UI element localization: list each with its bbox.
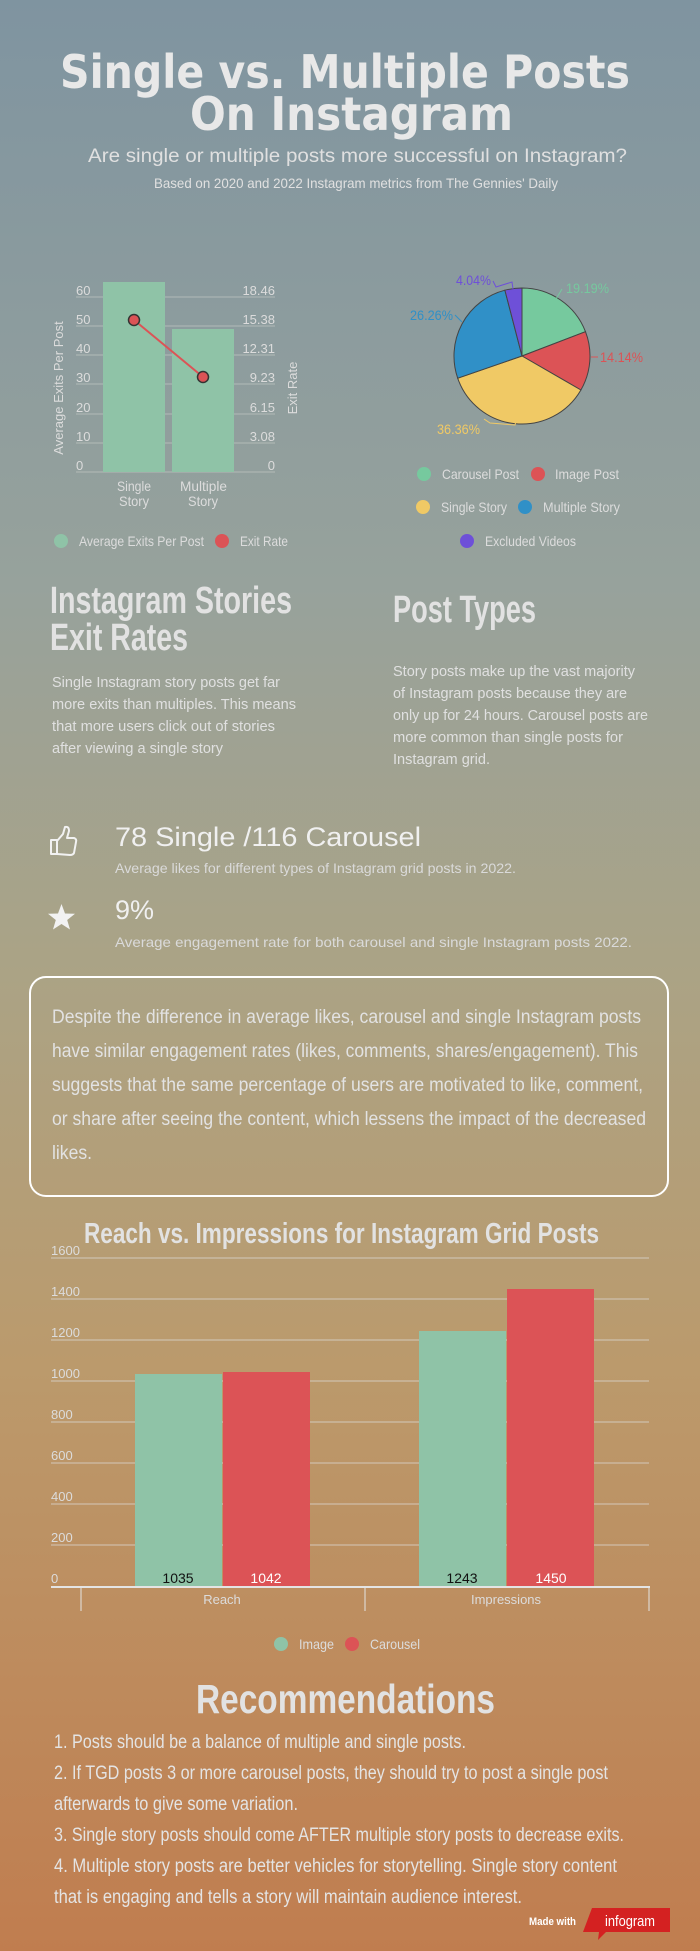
chart: story exits bar+line: Story xyxy=(188,493,218,509)
pie labels: 36.36% xyxy=(437,421,480,437)
chart: story exits bar+line: 20 xyxy=(76,400,90,415)
legend: post types: Excluded Videos xyxy=(485,533,576,549)
bar chart: reach vs impressions: 1450 xyxy=(535,1570,567,1586)
legend: post types: Single Story xyxy=(441,499,507,515)
heading: stories exit rates: Instagram Stories xyxy=(50,580,292,622)
bar chart: reach vs impressions: 1042 xyxy=(250,1570,282,1586)
bar chart: reach vs impressions: 1035 xyxy=(162,1570,194,1586)
text: post types: of Instagram posts because they are xyxy=(393,685,627,702)
text: post types: Instagram grid. xyxy=(393,751,490,768)
text: post types xyxy=(393,663,648,768)
legend: reach vs impressions: Carousel xyxy=(370,1636,420,1652)
legend: reach vs impressions xyxy=(274,1636,420,1652)
chart: story exits bar+line: Single xyxy=(117,478,151,494)
callout box: or share after seeing the content, which lessens the impact of the decreased xyxy=(52,1109,646,1130)
pie labels: 19.19% xyxy=(566,280,609,296)
heading: recommendations: Recommendations xyxy=(196,1676,495,1722)
chart: story exits bar+line: Exit Rate xyxy=(285,362,300,414)
legend: story exits: Average Exits Per Post xyxy=(79,533,204,549)
badge: made with infogram: infogram xyxy=(605,1913,655,1930)
list: recommendations: 2. If TGD posts 3 or more carousel posts, they should try to post a single post xyxy=(54,1763,609,1784)
badge: made with infogram: Made with xyxy=(529,1916,576,1928)
text: post types: only up for 24 hours. Carousel posts are xyxy=(393,707,648,724)
legend: story exits xyxy=(54,533,288,549)
stat: engagement rate xyxy=(115,895,632,950)
text: post types: more common than single posts for xyxy=(393,729,623,746)
chart: story exits bar+line: 0 xyxy=(268,458,275,473)
pie labels: 26.26% xyxy=(410,307,453,323)
stat: engagement rate: 9% xyxy=(115,895,154,925)
badge: made with infogram xyxy=(529,1908,670,1940)
callout box: Despite the difference in average likes, carousel and single Instagram posts xyxy=(52,1007,641,1028)
chart: story exits bar+line: 0 xyxy=(76,458,83,473)
bar chart: reach vs impressions: 1200 xyxy=(51,1325,80,1340)
chart: story exits bar+line: 40 xyxy=(76,341,90,356)
subtitle: Are single or multiple posts more successful on Instagram? xyxy=(88,146,627,167)
stat: average likes: 78 Single /116 Carousel xyxy=(115,822,421,852)
bar chart: reach vs impressions: 1243 xyxy=(446,1570,478,1586)
bar chart: reach vs impressions: 1400 xyxy=(51,1284,80,1299)
chart: story exits bar+line: 12.31 xyxy=(242,341,275,356)
bar chart: reach vs impressions: 1000 xyxy=(51,1366,80,1381)
legend: post types: Image Post xyxy=(555,466,619,482)
legend: post types xyxy=(416,466,620,549)
title: On Instagram xyxy=(190,87,513,141)
chart: story exits bar+line: Story xyxy=(119,493,149,509)
text: stories exit rates: that more users click out of stories xyxy=(52,718,275,735)
icon: star xyxy=(48,904,75,930)
callout box: have similar engagement rates (likes, comments, shares/engagement). This xyxy=(52,1041,638,1062)
exit rate line xyxy=(128,314,208,382)
bar chart: reach vs impressions: 0 xyxy=(51,1571,58,1586)
list: recommendations xyxy=(54,1732,624,1908)
legend: reach vs impressions: Image xyxy=(299,1636,334,1652)
list: recommendations: afterwards to give some variation. xyxy=(54,1794,298,1815)
list: recommendations: 1. Posts should be a balance of multiple and single posts. xyxy=(54,1732,466,1753)
text: stories exit rates xyxy=(52,674,296,757)
legend: post types: Carousel Post xyxy=(442,466,519,482)
title: Single vs. Multiple Posts xyxy=(60,45,630,99)
bar chart: reach vs impressions: 200 xyxy=(51,1530,73,1545)
callout box: likes. xyxy=(52,1143,92,1164)
chart: story exits bar+line: 50 xyxy=(76,312,90,327)
chart: story exits bar+line: 6.15 xyxy=(250,400,275,415)
bar: multiple story xyxy=(172,329,234,472)
pie labels xyxy=(410,272,643,437)
text: post types: Story posts make up the vast majority xyxy=(393,663,635,680)
stat: engagement rate: Average engagement rate for both carousel and single Instagram posts 2022. xyxy=(115,934,632,950)
stat: average likes xyxy=(115,822,516,876)
chart: story exits bar+line: Multiple xyxy=(180,478,227,494)
heading: stories exit rates: Exit Rates xyxy=(50,617,188,659)
heading: post types: Post Types xyxy=(393,589,536,631)
chart: story exits bar+line: 3.08 xyxy=(250,429,275,444)
chart: story exits bar+line xyxy=(51,282,300,509)
chart: story exits bar+line: 30 xyxy=(76,370,90,385)
legend: story exits: Exit Rate xyxy=(240,533,288,549)
chart: story exits bar+line: 15.38 xyxy=(242,312,275,327)
chart: story exits bar+line: 60 xyxy=(76,283,90,298)
bar chart: reach vs impressions: 400 xyxy=(51,1489,73,1504)
pie chart: post types xyxy=(454,288,590,424)
bar chart: reach vs impressions: 600 xyxy=(51,1448,73,1463)
chart: story exits bar+line: Average Exits Per Post xyxy=(51,321,66,455)
icon: thumbs up xyxy=(51,827,76,855)
bar: single story xyxy=(103,282,165,472)
list: recommendations: 4. Multiple story posts are better vehicles for storytelling. Single story content xyxy=(54,1856,618,1877)
legend: post types: Multiple Story xyxy=(543,499,620,515)
stat: average likes: Average likes for different types of Instagram grid posts in 2022. xyxy=(115,860,516,876)
bar chart: reach vs impressions xyxy=(51,1243,650,1611)
text: stories exit rates: after viewing a single story xyxy=(52,740,223,757)
chart: story exits bar+line: 9.23 xyxy=(250,370,275,385)
text: stories exit rates: more exits than multiples. This means xyxy=(52,696,296,713)
chart: story exits bar+line: 10 xyxy=(76,429,90,444)
heading: stories exit rates xyxy=(50,580,292,659)
callout box xyxy=(30,977,668,1196)
pie labels: 14.14% xyxy=(600,349,643,365)
callout box: suggests that the same percentage of users are motivated to like, comment, xyxy=(52,1075,643,1096)
list: recommendations: that is engaging and tells a story will maintain audience interest. xyxy=(54,1887,522,1908)
chart: story exits bar+line: 18.46 xyxy=(242,283,275,298)
bar chart: reach vs impressions: Impressions xyxy=(471,1592,542,1607)
bar chart: reach vs impressions: 1600 xyxy=(51,1243,80,1258)
pie labels: 4.04% xyxy=(456,272,491,288)
bar chart: reach vs impressions: Reach xyxy=(203,1592,241,1607)
source line: Based on 2020 and 2022 Instagram metrics from The Gennies' Daily xyxy=(154,175,558,191)
text: stories exit rates: Single Instagram story posts get far xyxy=(52,674,280,691)
title xyxy=(60,45,630,141)
bar chart: reach vs impressions: 800 xyxy=(51,1407,73,1422)
